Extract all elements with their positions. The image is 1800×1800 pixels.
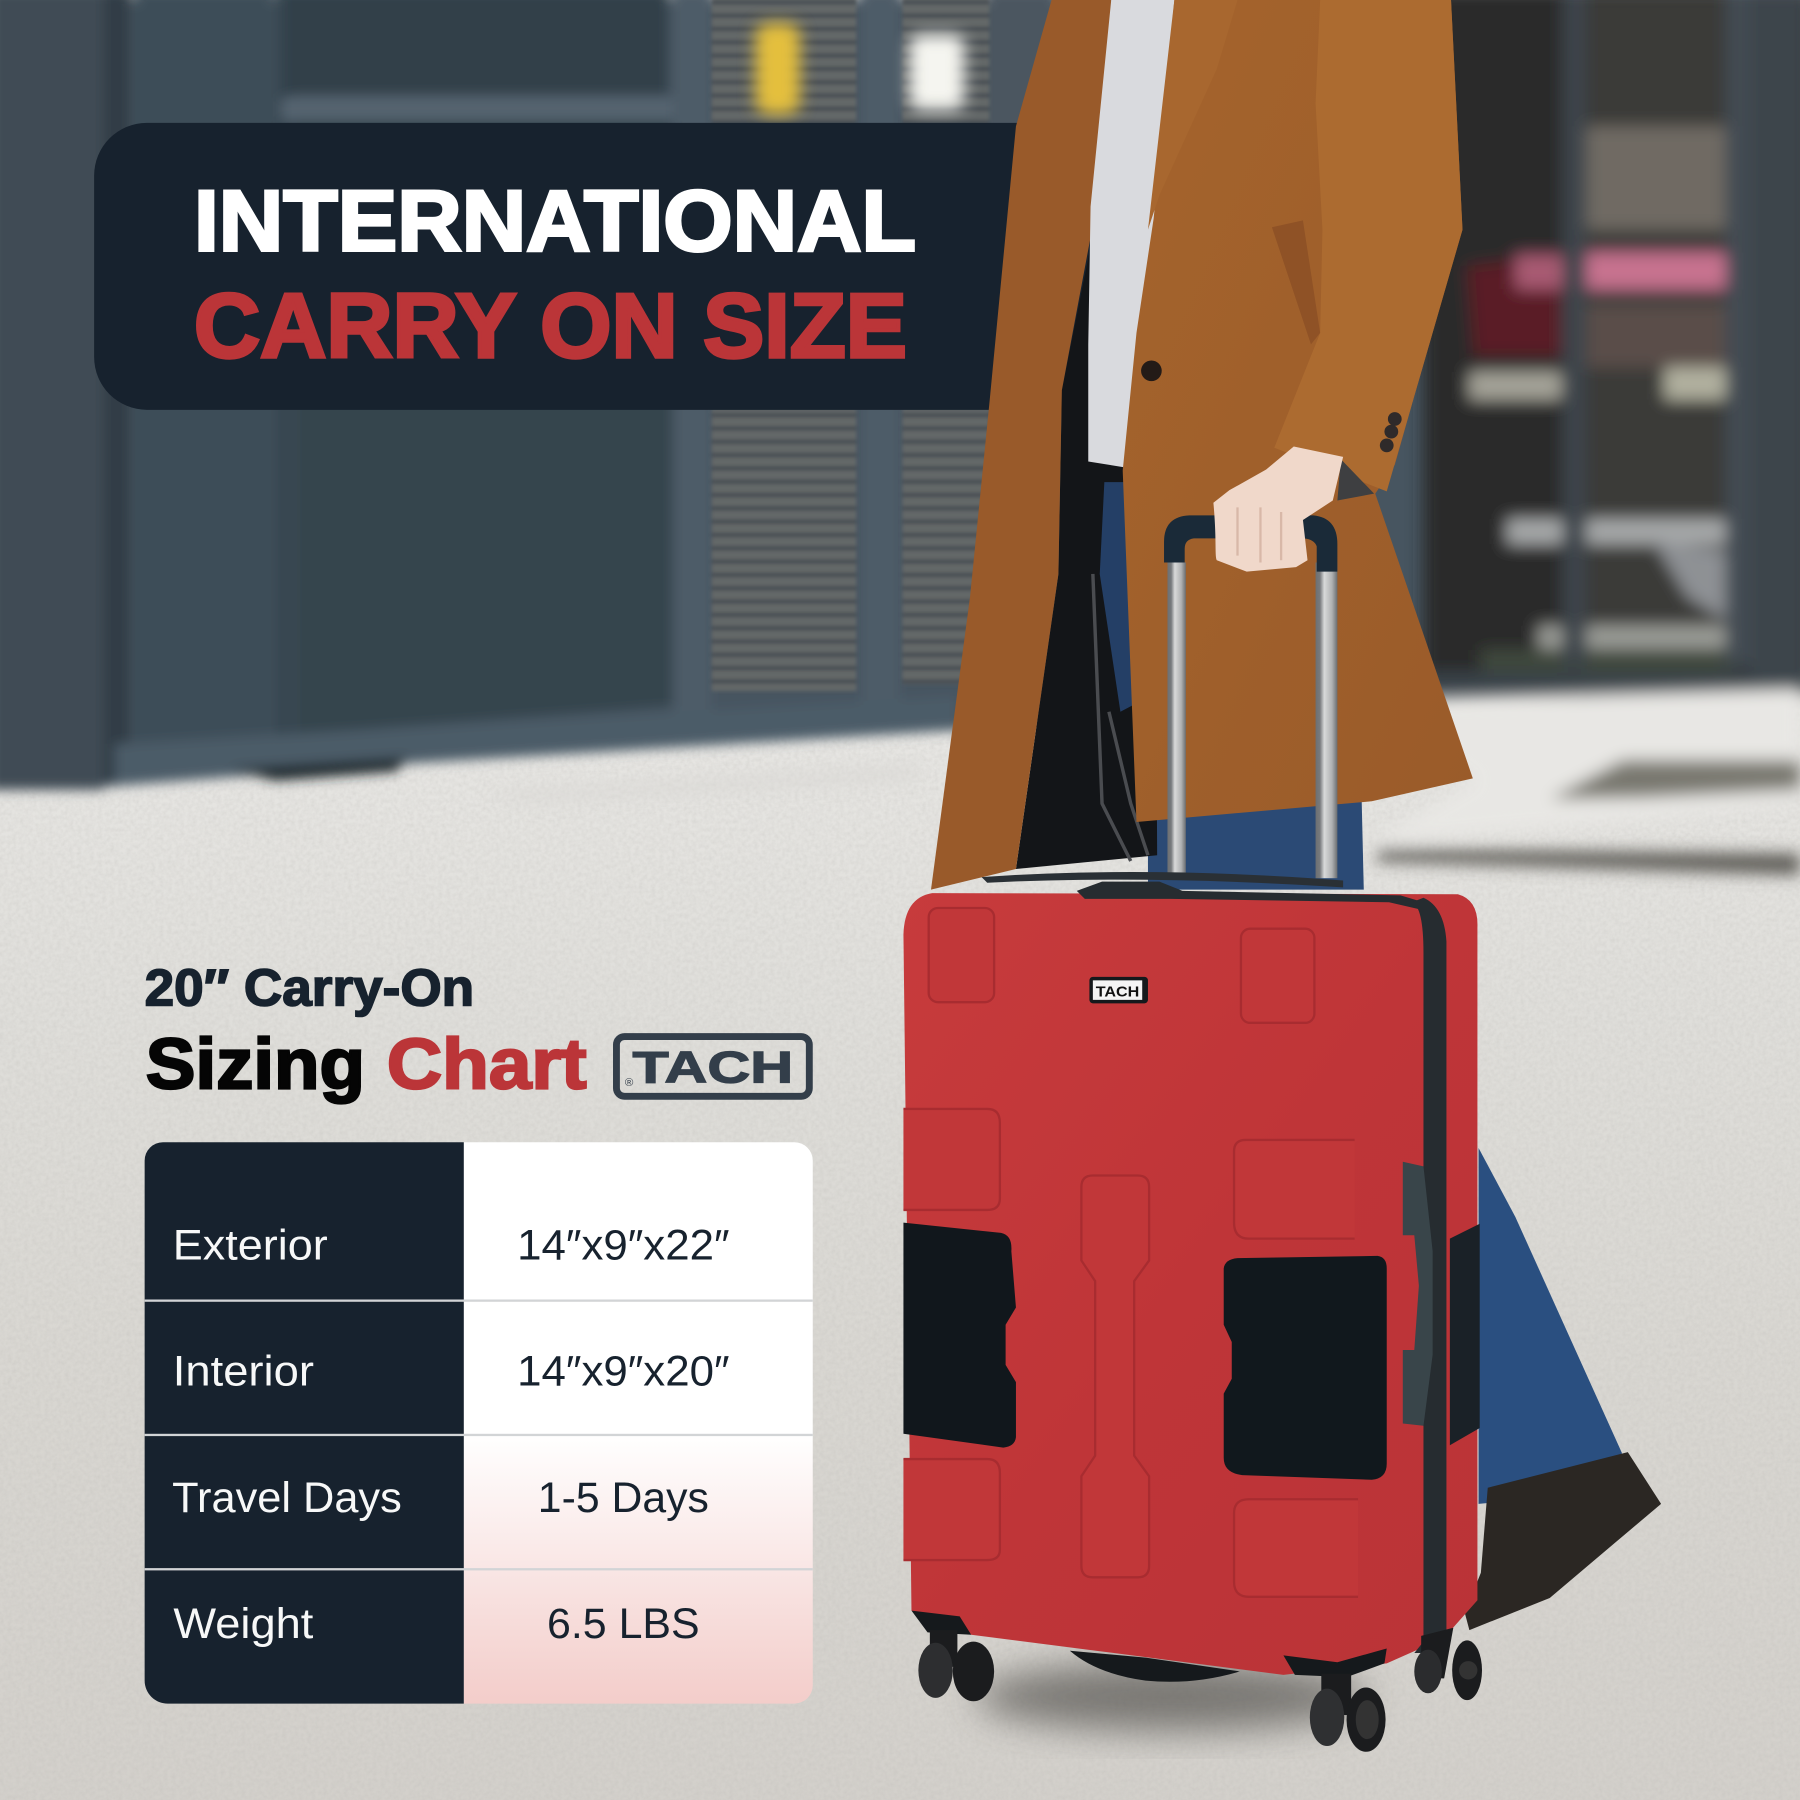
bottom trim: [911, 1611, 1387, 1682]
row: travel days: [172, 1474, 709, 1521]
rear right wheels: [1414, 1628, 1482, 1700]
row: travel days: 1-5 Days: [538, 1474, 709, 1521]
side dark panel: [1450, 1224, 1480, 1445]
right lower emboss: [1234, 1499, 1358, 1597]
title panel: [94, 123, 1102, 410]
coat button: [1141, 360, 1162, 381]
jeans rear leg: [1479, 1148, 1622, 1504]
left black connector panel: [903, 1223, 1016, 1448]
row: interior: Interior: [173, 1348, 314, 1395]
lapel: [1148, 0, 1238, 230]
pavement: [0, 689, 1800, 1800]
front left wheels: [918, 1630, 994, 1701]
jeans at waist: [1100, 482, 1142, 712]
brand badge: [1089, 977, 1148, 1003]
row: weight: [173, 1600, 700, 1647]
coat left panel: [931, 0, 1111, 890]
hand: [1213, 447, 1343, 572]
shoe: [1465, 1452, 1661, 1630]
center dogbone emboss: [1081, 1176, 1149, 1577]
left middle emboss: [903, 1109, 1000, 1210]
red suitcase: [903, 872, 1480, 1682]
front right wheels: [1310, 1674, 1386, 1752]
row dividers: [145, 1299, 813, 1570]
row: interior: [173, 1348, 730, 1395]
panel background: [94, 123, 1102, 410]
street reflections and lights: [482, 0, 1800, 875]
fingers: [1238, 507, 1281, 562]
title line 1: INTERNATIONAL: [194, 173, 916, 269]
left lower emboss: [903, 1459, 1000, 1560]
row: weight: 6.5 LBS: [547, 1600, 700, 1647]
white shirt: [1088, 0, 1178, 467]
embossed panels: [903, 908, 1358, 1597]
right pole: [1316, 562, 1337, 878]
registered mark: ®: [625, 1077, 634, 1089]
row: travel days: Travel Days: [172, 1474, 402, 1521]
right black connector panel: [1224, 1256, 1387, 1480]
label column: [145, 1142, 464, 1704]
building facade: [0, 0, 1800, 790]
subtitle: 20″ Carry-On: [145, 959, 474, 1017]
coat pocket: [1272, 220, 1320, 344]
value column: [464, 1142, 813, 1704]
sleeve: [1274, 0, 1462, 491]
top strap: [982, 872, 1343, 887]
heading accent: Chart: [387, 1025, 587, 1104]
right middle emboss: [1234, 1140, 1355, 1239]
lining stripes: [1093, 574, 1148, 861]
suitcase telescoping handle: [1164, 447, 1343, 878]
person wearing brown coat: [931, 0, 1661, 1630]
sizing chart heading: [145, 959, 587, 1104]
zip top: [1077, 882, 1423, 909]
row: exterior: [173, 1221, 730, 1268]
shutters: [712, 0, 990, 691]
coat right panel and sleeve: [1123, 0, 1473, 822]
row: interior: 14″x9″x20″: [517, 1348, 730, 1395]
grip: [1164, 515, 1337, 572]
coat lining: [1016, 212, 1157, 869]
cuff lining: [1337, 459, 1374, 501]
jeans upper: [1148, 792, 1364, 890]
left pole: [1167, 562, 1186, 878]
row: weight: Weight: [173, 1600, 314, 1647]
side carry handle: [1403, 1162, 1433, 1426]
cuff buttons: [1380, 412, 1402, 452]
top left emboss: [929, 908, 994, 1002]
logo wordmark: TACH: [633, 1043, 793, 1093]
zipper band: [1412, 898, 1446, 1653]
brand badge: TACH: [1096, 983, 1139, 1000]
suitcase ground shadow: [976, 1662, 1366, 1731]
logo frame: [616, 1037, 809, 1096]
shell: [903, 893, 1477, 1675]
row: exterior: 14″x9″x22″: [517, 1221, 730, 1268]
sizing table: [145, 1142, 813, 1704]
title line 2: CARRY ON SIZE: [194, 276, 907, 377]
heading: Sizing: [146, 1025, 365, 1104]
TACH logo: [616, 1037, 809, 1096]
row: exterior: Exterior: [173, 1221, 328, 1268]
top right emboss: [1241, 929, 1314, 1023]
suitcase wheels: [918, 1628, 1482, 1752]
